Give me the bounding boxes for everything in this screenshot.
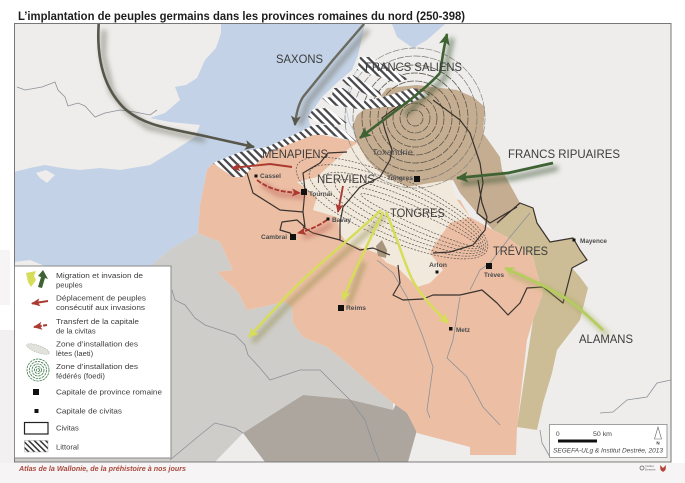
labels: peoples: TRÉVIRES <box>493 243 548 258</box>
legend icon: migration arrows <box>26 270 48 288</box>
arrow shadows <box>103 30 608 342</box>
north arrow: N <box>656 440 660 446</box>
legend text <box>56 271 162 452</box>
legend icon: civitas boundary <box>24 422 48 434</box>
city names: Trèves <box>484 273 505 279</box>
legend text: consécutif aux invasions <box>56 303 145 312</box>
rivers <box>17 62 671 462</box>
legend text: de la civitas <box>56 326 96 336</box>
page margins <box>0 250 685 483</box>
scale labels: 0 <box>556 431 560 438</box>
city names: Bavay <box>332 218 352 224</box>
legend icon: displacement arrow <box>32 301 48 304</box>
credit: SEGEFA-ULg & Institut Destrée, 2013 <box>553 448 663 454</box>
labels: peoples: SAXONS <box>276 52 323 66</box>
city names: Cambrai <box>261 235 287 241</box>
labels: peoples <box>262 52 633 346</box>
city names <box>260 174 608 334</box>
labels: peoples: FRANCS RIPUAIRES <box>508 147 620 161</box>
legend icon: lètes zone <box>26 342 50 356</box>
legend text: Migration et invasion de <box>56 271 143 280</box>
arrows: red capital transfers <box>257 180 327 233</box>
region: grey Gaul <box>14 233 393 462</box>
land: Britain <box>14 24 221 172</box>
logos: Destrée <box>645 468 656 472</box>
scale labels <box>556 431 612 438</box>
arrow: Francs saliens <box>360 34 447 138</box>
legend icon: civitas capital <box>34 409 38 413</box>
sea: inner bay <box>392 24 445 48</box>
arrow: Saxons along the coast <box>295 24 364 125</box>
panel: legend <box>14 266 171 458</box>
region: peach <box>198 133 543 455</box>
logos: Institut <box>645 464 654 468</box>
legend text: peuples <box>56 280 83 290</box>
fédérés zone <box>345 48 485 188</box>
scale bar <box>558 440 597 442</box>
city names: Reims <box>346 306 367 312</box>
legend icon: fédérés zone <box>27 359 49 381</box>
arrow: Francs ripuaires <box>457 163 553 178</box>
legend text: Zone d’installation des <box>56 340 138 348</box>
arrow: Saxons over Britain <box>98 20 254 147</box>
labels: peoples: TONGRES <box>390 206 445 220</box>
region: cream <box>297 143 470 287</box>
legend icon: province capital <box>33 389 39 395</box>
city names: Cassel <box>260 174 281 180</box>
title: L’implantation de peuples germains dans les provinces romaines du nord (250-398) <box>18 9 465 23</box>
logos <box>640 464 666 472</box>
city names: Metz <box>456 328 470 334</box>
city names: Mayence <box>580 239 608 245</box>
arrows: red displacements <box>232 164 343 212</box>
label: Toxandrie: Toxandrie <box>372 148 414 157</box>
legend text: Zone d’installation des <box>56 362 138 371</box>
region: brown <box>352 85 520 230</box>
legend icon: littoral <box>24 440 48 452</box>
region: dark grey <box>243 395 417 462</box>
city names: Tongres <box>387 176 414 182</box>
legend text: Déplacement de peuples <box>56 294 146 302</box>
legend text: Transfert de la capitale <box>56 317 139 326</box>
arrows: yellow migrations <box>249 210 448 337</box>
labels: peoples: MENAPIENS <box>262 147 328 161</box>
atlas caption: Atlas de la Wallonie, de la préhistoire à nos jours <box>18 464 186 473</box>
legend text: lètes (laeti) <box>56 349 94 358</box>
labels: peoples: FRANCS SALIENS <box>365 60 462 74</box>
city names: Tournai <box>309 192 332 198</box>
panel: scale and credit <box>550 424 667 458</box>
legend text: fédérés (foedi) <box>56 372 105 380</box>
labels: peoples: ALAMANS <box>579 332 633 346</box>
scale labels: 50 km <box>593 431 612 438</box>
civitas boundaries <box>247 100 587 315</box>
city names: Arlon <box>429 263 447 269</box>
labels: peoples: NERVIENS <box>317 172 375 186</box>
legend text: Littoral <box>56 442 79 452</box>
arrow: Alamans <box>505 268 603 330</box>
capitals <box>254 174 576 330</box>
littoral hatching <box>213 57 430 177</box>
lètes zone <box>296 156 488 260</box>
land: Isle of Wight <box>36 170 55 183</box>
region: tan <box>493 203 588 430</box>
legend icon: transfer arrow <box>34 325 47 327</box>
legend text: Capitale de civitas <box>56 406 122 416</box>
legend text: Capitale de province romaine <box>56 388 162 396</box>
legend text: Civitas <box>56 424 79 432</box>
